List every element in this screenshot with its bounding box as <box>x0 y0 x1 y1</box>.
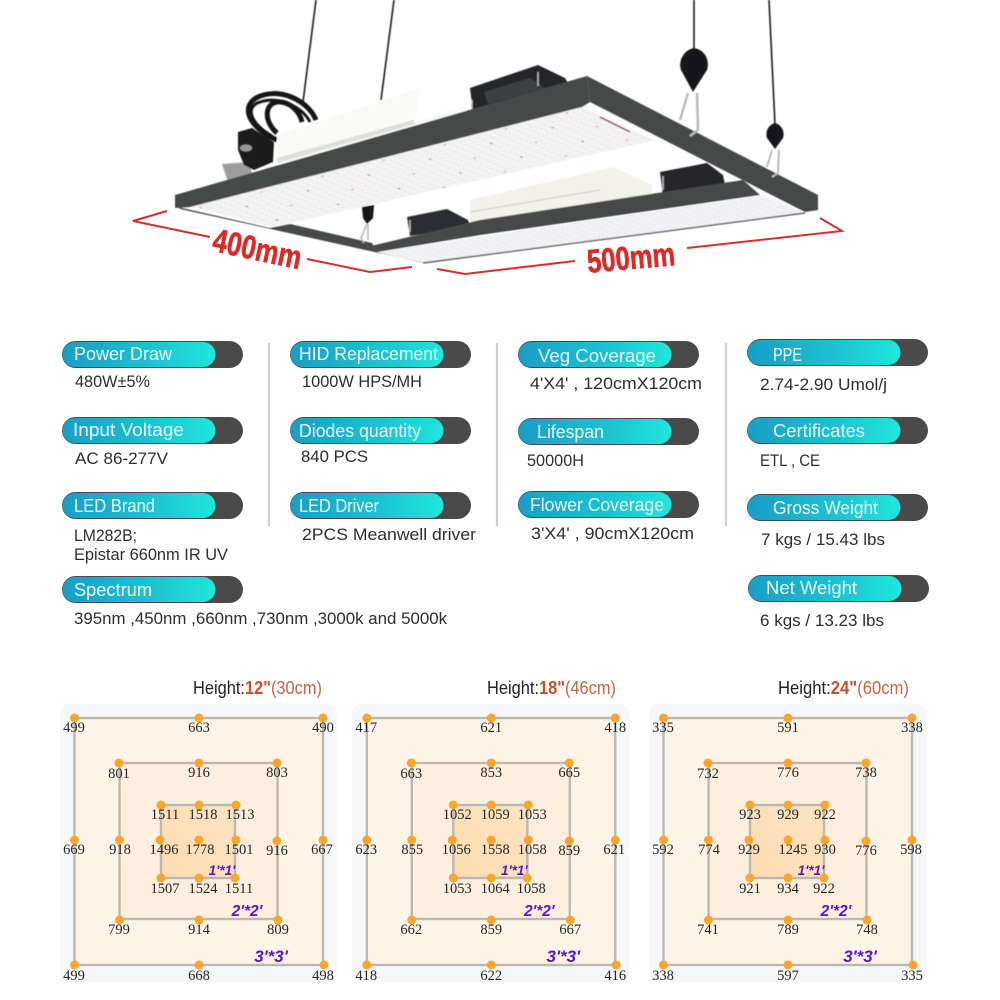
readings: 738 <box>855 765 877 781</box>
readings: 1778 <box>186 842 214 858</box>
value: input voltage: AC 86-277V <box>75 449 169 468</box>
measurement dots <box>70 714 328 970</box>
pill: PPE: PPE <box>773 345 802 365</box>
pill: flower coverage <box>518 491 699 518</box>
value: spectrum: 395nm ,450nm ,660nm ,730nm ,3000k and 5000k <box>74 609 447 628</box>
measurement dots <box>362 714 621 970</box>
front driver box <box>470 167 652 224</box>
readings: 667 <box>559 922 581 938</box>
readings: 1524 <box>188 881 218 897</box>
pill: lifespan: Lifespan <box>537 422 604 442</box>
readings: 498 <box>312 968 334 984</box>
map background and zones <box>60 704 337 982</box>
readings: 732 <box>697 766 719 782</box>
readings: 855 <box>401 842 423 858</box>
readings: 918 <box>109 842 131 858</box>
readings: 490 <box>312 720 334 736</box>
value: net weight: 6 kgs / 13.23 lbs <box>760 611 884 630</box>
pill: spectrum: Spectrum <box>74 580 152 600</box>
zone tags: 1'*1' <box>209 863 236 878</box>
readings: 1511 <box>151 807 179 823</box>
readings: 922 <box>814 807 836 823</box>
readings: 748 <box>856 922 878 938</box>
pill: gross weight <box>747 494 928 521</box>
rear fan <box>470 65 572 112</box>
zone tags <box>209 863 289 966</box>
readings: 335 <box>652 720 674 736</box>
value: LED brand: LM282B; <box>74 526 137 545</box>
readings: 591 <box>777 720 799 736</box>
readings: 499 <box>63 968 85 984</box>
dimension 500mm <box>437 218 842 280</box>
heading: 12 inch: Height:12"(30cm) <box>193 678 322 698</box>
metal frame <box>175 76 818 263</box>
readings: 859 <box>480 922 502 938</box>
zone tags: 2'*2' <box>820 903 853 920</box>
readings: 774 <box>698 842 721 858</box>
dimension 400mm: 400mm <box>210 221 305 276</box>
pill: LED brand: LED Brand <box>74 496 155 516</box>
spec column 3 <box>518 341 702 543</box>
readings: 741 <box>697 922 719 938</box>
readings: 1064 <box>481 881 511 897</box>
pill: flower coverage: Flower Coverage <box>530 495 664 515</box>
zone tags: 3'*3' <box>843 947 878 966</box>
readings: 1053 <box>443 881 472 897</box>
rope ratchet lower <box>361 205 374 243</box>
LED board front <box>377 195 805 263</box>
map background and zones <box>352 704 629 982</box>
readings: 1056 <box>442 842 471 858</box>
readings: 1511 <box>225 881 253 897</box>
readings: 930 <box>814 842 836 858</box>
heading: 18 inch: Height:18"(46cm) <box>487 678 616 698</box>
zone tags: 2'*2' <box>523 903 556 920</box>
readings: 418 <box>355 968 377 984</box>
readings: 1518 <box>188 807 218 823</box>
pill: power draw: Power Draw <box>74 344 173 364</box>
readings: 922 <box>813 881 835 897</box>
readings <box>652 720 923 984</box>
readings: 669 <box>63 842 85 858</box>
value: gross weight: 7 kgs / 15.43 lbs <box>761 530 885 549</box>
pill: HID replacement <box>290 341 471 368</box>
readings: 853 <box>480 765 502 781</box>
pill: certificates: Certificates <box>773 421 865 441</box>
pill: diodes quantity: Diodes quantity <box>299 421 421 441</box>
readings: 934 <box>777 881 800 897</box>
value: LED driver: 2PCS Meanwell driver <box>302 525 476 544</box>
readings: 859 <box>558 843 580 859</box>
readings: 335 <box>901 968 923 984</box>
readings: 1053 <box>518 807 547 823</box>
spec column 2 <box>290 341 476 544</box>
readings: 1058 <box>517 881 546 897</box>
readings: 621 <box>603 842 625 858</box>
readings: 914 <box>188 922 211 938</box>
dimension 500mm: 500mm <box>586 235 676 280</box>
LED board rear <box>190 107 655 227</box>
readings: 623 <box>355 842 377 858</box>
zone tags: 3'*3' <box>546 947 581 966</box>
pill: LED brand <box>62 492 243 519</box>
readings: 776 <box>777 765 799 781</box>
pill: veg coverage <box>518 341 699 368</box>
readings: 338 <box>901 720 923 736</box>
readings: 921 <box>739 881 761 897</box>
lamp product photo <box>175 0 818 263</box>
readings: 1052 <box>443 807 472 823</box>
rope ratchet small <box>766 123 784 177</box>
measurement dots <box>659 714 918 970</box>
readings: 1059 <box>481 807 510 823</box>
pill: HID replacement: HID Replacement <box>299 344 438 364</box>
spec column 4 <box>747 339 929 630</box>
value: certificates: ETL , CE <box>760 451 820 470</box>
value: flower coverage: 3'X4' , 90cmX120cm <box>531 524 694 543</box>
readings: 1513 <box>226 807 254 823</box>
map background and zones <box>649 704 926 982</box>
readings: 1501 <box>224 842 254 858</box>
rope ratchet large <box>680 48 708 136</box>
pill: LED driver <box>290 492 471 519</box>
zone tags: 1'*1' <box>798 863 825 878</box>
readings: 916 <box>188 765 210 781</box>
pill: net weight <box>748 575 929 602</box>
rear driver box <box>277 88 470 175</box>
readings: 338 <box>652 968 674 984</box>
hanging wires <box>303 0 775 125</box>
value: lifespan: 50000H <box>527 451 584 470</box>
pill: PPE <box>747 339 928 366</box>
readings: 1058 <box>518 842 547 858</box>
value: veg coverage: 4'X4' , 120cmX120cm <box>530 374 702 393</box>
readings: 667 <box>311 842 333 858</box>
readings <box>63 720 334 984</box>
pill: certificates <box>747 417 928 444</box>
readings: 1558 <box>481 842 510 858</box>
readings: 416 <box>604 968 626 984</box>
readings: 923 <box>739 807 761 823</box>
value: LED brand: Epistar 660nm IR UV <box>74 545 229 564</box>
readings: 662 <box>400 922 422 938</box>
value: LED brand <box>74 526 229 564</box>
pill: power draw <box>62 341 243 368</box>
heatmap panel: height 18 inch <box>352 678 629 984</box>
pill: gross weight: Gross Weight <box>773 498 878 518</box>
readings: 1245 <box>778 842 808 858</box>
value: diodes quantity: 840 PCS <box>301 447 368 466</box>
zone tags: 3'*3' <box>254 947 289 966</box>
dimension 400mm <box>133 211 412 276</box>
readings: 801 <box>108 766 130 782</box>
readings: 598 <box>900 842 922 858</box>
heatmap panel: height 12 inch <box>60 678 337 984</box>
pill: input voltage: Input Voltage <box>73 420 184 440</box>
spec column 1 <box>62 341 447 628</box>
readings: 803 <box>266 765 288 781</box>
heatmap panel: height 24 inch <box>649 678 926 984</box>
readings: 929 <box>777 807 799 823</box>
readings: 776 <box>855 843 877 859</box>
pill: veg coverage: Veg Coverage <box>538 346 656 366</box>
readings: 417 <box>355 720 377 736</box>
heading: 24 inch: Height:24"(60cm) <box>778 678 909 698</box>
readings: 668 <box>188 968 210 984</box>
readings: 665 <box>558 765 580 781</box>
pill: LED driver: LED Driver <box>299 496 379 516</box>
readings: 1496 <box>150 842 178 858</box>
readings: 499 <box>63 720 85 736</box>
readings: 789 <box>777 922 799 938</box>
readings: 799 <box>108 922 130 938</box>
readings: 621 <box>480 720 502 736</box>
pill: diodes quantity <box>290 417 471 444</box>
pill: input voltage <box>62 417 243 444</box>
value: HID replacement: 1000W HPS/MH <box>302 372 422 391</box>
zone tags <box>798 863 878 966</box>
value: PPE: 2.74-2.90 Umol/j <box>760 375 887 394</box>
readings: 418 <box>604 720 626 736</box>
front fans <box>407 163 725 236</box>
readings: 592 <box>652 842 674 858</box>
pill: net weight: Net Weight <box>766 578 857 598</box>
readings: 809 <box>267 922 289 938</box>
zone tags <box>501 863 581 966</box>
readings: 597 <box>777 968 799 984</box>
readings: 663 <box>400 766 422 782</box>
readings <box>355 720 626 984</box>
readings: 929 <box>738 842 760 858</box>
pill: spectrum <box>62 576 243 603</box>
value: power draw: 480W±5% <box>75 372 150 391</box>
readings: 622 <box>480 968 502 984</box>
zone tags: 1'*1' <box>501 863 528 878</box>
power cables and plug <box>222 94 316 182</box>
pill: lifespan <box>518 418 699 445</box>
readings: 663 <box>188 720 210 736</box>
readings: 1507 <box>150 881 180 897</box>
readings: 916 <box>266 843 288 859</box>
zone tags: 2'*2' <box>231 903 264 920</box>
